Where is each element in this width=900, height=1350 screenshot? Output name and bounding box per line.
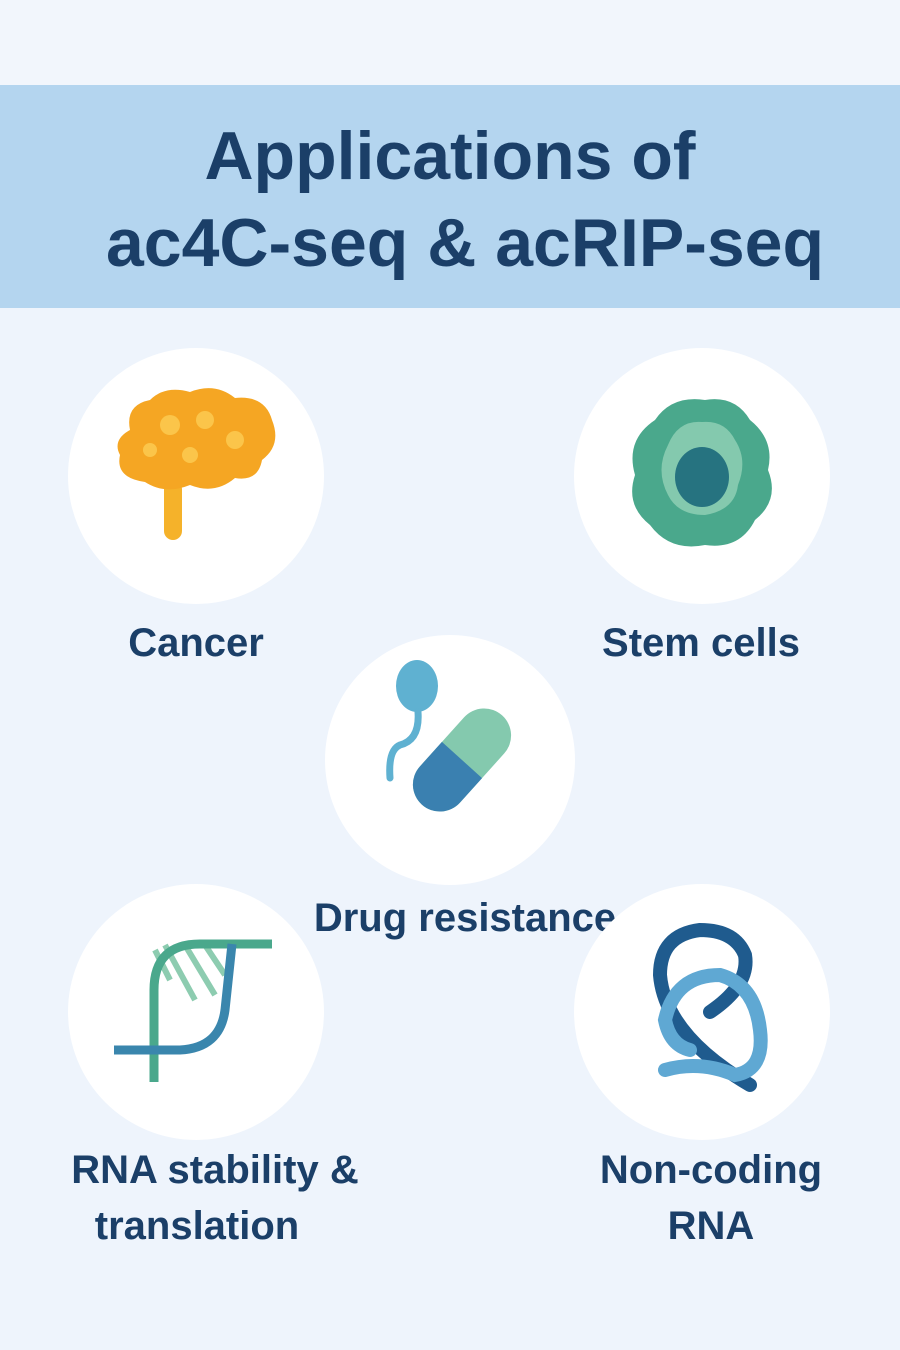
label: stem cells: Stem cells	[602, 621, 800, 665]
icon: tumor	[118, 388, 275, 540]
icon: knot	[660, 930, 761, 1085]
label: cancer: Cancer	[128, 621, 264, 665]
panel: cancer	[68, 348, 324, 665]
panel: RNA stability	[68, 884, 359, 1248]
icon: pill and cell	[390, 660, 522, 823]
panel: stem cells	[574, 348, 830, 665]
label: RNA stability: RNA stability &	[71, 1148, 359, 1192]
title banner: ac4C-seq & acRIP-seq	[106, 205, 824, 281]
label: non-coding RNA: Non-coding	[600, 1148, 822, 1192]
icon: stem cell	[632, 399, 772, 546]
panel: non-coding RNA	[574, 884, 830, 1248]
title banner	[0, 85, 900, 308]
panel: non-coding RNA: RNA	[668, 1204, 754, 1248]
panel: RNA stability: translation	[95, 1204, 299, 1248]
title banner: Applications of	[204, 118, 696, 194]
icon: helix	[114, 944, 272, 1082]
label: drug resistance: Drug resistance	[314, 896, 616, 940]
panel: drug resistance	[314, 635, 616, 940]
